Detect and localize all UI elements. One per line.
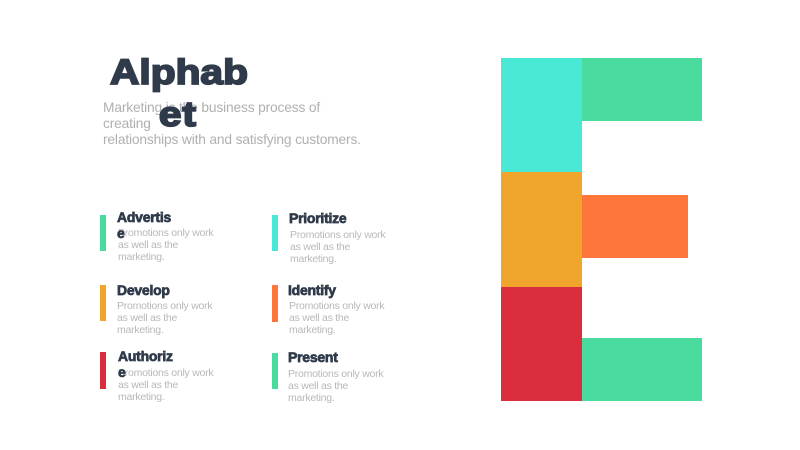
color bar — [100, 352, 106, 389]
heading: Authoriz — [118, 348, 173, 364]
heading: e — [117, 225, 125, 241]
title: Alphab — [110, 53, 248, 92]
bottom arm — [582, 338, 702, 401]
description — [117, 300, 212, 336]
title — [110, 53, 248, 134]
color bar — [100, 285, 106, 321]
description: Promotions only work — [118, 227, 213, 239]
description — [118, 227, 214, 263]
description: marketing. — [290, 253, 337, 265]
title: et — [159, 95, 197, 134]
description: marketing. — [117, 324, 164, 336]
heading: e — [118, 364, 126, 380]
description — [290, 229, 386, 265]
middle arm — [582, 195, 688, 258]
top spine block — [501, 58, 582, 172]
item: Present — [272, 349, 384, 404]
description: as well as the — [288, 380, 348, 392]
intro text — [103, 100, 361, 147]
description — [288, 368, 384, 404]
intro text: Marketing is the business process of — [103, 100, 320, 115]
description: as well as the — [118, 239, 178, 251]
heading: Prioritize — [289, 210, 346, 226]
item: Identify — [272, 282, 384, 336]
item: Develop — [100, 282, 212, 336]
description: marketing. — [289, 324, 336, 336]
description: Promotions only work — [289, 300, 384, 312]
item: Advertise — [100, 209, 214, 263]
description: Promotions only work — [118, 367, 213, 379]
bottom spine block — [501, 287, 582, 401]
description: as well as the — [118, 379, 178, 391]
description: marketing. — [118, 251, 165, 263]
description: marketing. — [118, 391, 165, 403]
description: marketing. — [288, 392, 335, 404]
heading: Present — [288, 349, 338, 365]
heading: Develop — [117, 282, 170, 298]
description — [289, 300, 384, 336]
top arm — [582, 58, 702, 121]
letter E graphic — [501, 58, 702, 401]
description: as well as the — [290, 241, 350, 253]
color bar — [272, 285, 278, 322]
color bar — [272, 353, 278, 389]
description: Promotions only work — [290, 229, 385, 241]
heading — [118, 348, 173, 380]
item: Prioritize — [272, 210, 386, 265]
description: as well as the — [289, 312, 349, 324]
intro text: relationships with and satisfying customers. — [103, 132, 361, 147]
middle spine block — [501, 172, 582, 287]
heading: Identify — [288, 282, 336, 298]
description — [118, 367, 214, 403]
heading: Advertis — [117, 209, 171, 225]
description: as well as the — [117, 312, 177, 324]
color bar — [272, 215, 278, 251]
color bar — [100, 215, 106, 251]
description: Promotions only work — [117, 300, 212, 312]
intro text: creating — [103, 116, 151, 131]
heading — [116, 209, 172, 241]
item: Authorize — [100, 348, 214, 403]
description: Promotions only work — [288, 368, 383, 380]
